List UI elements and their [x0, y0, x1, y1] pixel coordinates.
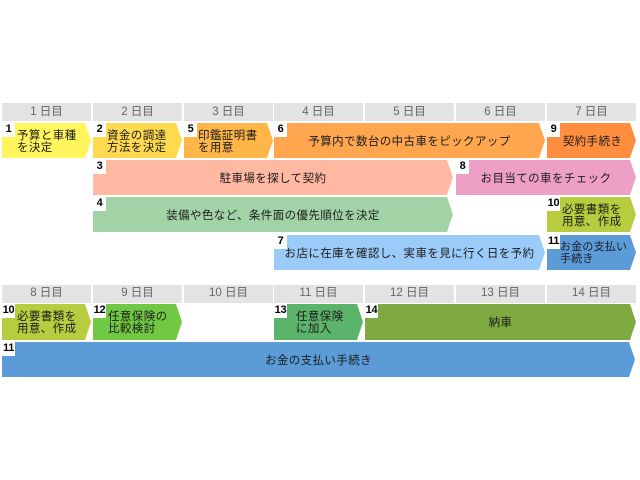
arrow 4: set priorities — [93, 197, 453, 232]
arrow 12: compare insurance: 任意保険の — [108, 311, 168, 323]
header: day 4 — [274, 103, 363, 121]
header: day 12 — [365, 285, 454, 303]
week 2 day headers — [2, 285, 636, 303]
arrow 8: check target car — [456, 160, 636, 195]
arrow 3: parking contract — [93, 160, 453, 195]
arrow 1: budget and car type: 予算と車種 — [17, 130, 76, 142]
arrow 1: budget and car type: を決定 — [17, 142, 53, 154]
header: day 7 — [547, 103, 636, 121]
arrow 2: funding method: 資金の調達 — [107, 130, 166, 142]
arrow 4: set priorities: 装備や色など、条件面の優先順位を決定 — [166, 209, 380, 221]
arrow 10: prepare documents: 10 — [548, 197, 559, 209]
arrow 11: payment procedure, full width: お金の支払い手続き — [265, 354, 372, 366]
header: day 6: 6 日目 — [484, 106, 517, 118]
arrow 2: funding method: 2 — [97, 123, 102, 135]
header: day 1 — [2, 103, 91, 121]
header: day 14 — [547, 285, 636, 303]
arrow 11: payment procedure: お金の支払い — [560, 241, 627, 253]
arrow 10: prepare documents: 用意、作成 — [562, 216, 622, 228]
arrow 10: prepare documents, week 2 — [2, 304, 91, 340]
header: day 8 — [2, 285, 91, 303]
arrow 11: payment procedure: 11 — [548, 235, 559, 247]
arrow 13: join insurance: 13 — [275, 304, 286, 316]
arrow 3: parking contract: 駐車場を探して契約 — [220, 172, 326, 184]
arrow 12: compare insurance: 12 — [94, 304, 105, 316]
arrow 11: payment procedure, full width: 11 — [3, 342, 14, 354]
header: day 14: 14 日目 — [572, 287, 611, 299]
header: day 9 — [93, 285, 182, 303]
header: day 2 — [93, 103, 182, 121]
header: day 3: 3 日目 — [212, 106, 245, 118]
header: day 5: 5 日目 — [393, 106, 426, 118]
header: day 10: 10 日目 — [209, 287, 248, 299]
arrow 12: compare insurance: 比較検討 — [108, 323, 156, 335]
header: day 5 — [365, 103, 454, 121]
arrow 14: delivery: 14 — [366, 304, 377, 316]
arrow 13: join insurance — [274, 304, 363, 340]
arrow 2: funding method: 方法を決定 — [107, 142, 166, 154]
arrow 13: join insurance: に加入 — [296, 323, 332, 335]
arrow 6: pick up used cars: 6 — [278, 123, 283, 135]
arrow 1: budget and car type: 1 — [6, 123, 11, 135]
arrow 14: delivery — [365, 304, 636, 340]
arrow 13: join insurance: 任意保険 — [296, 311, 344, 323]
header: day 10 — [184, 285, 273, 303]
arrow 4: set priorities: 4 — [97, 197, 102, 209]
arrow 6: pick up used cars: 予算内で数台の中古車をピックアップ — [308, 135, 511, 147]
header: day 9: 9 日目 — [121, 287, 154, 299]
header: day 7: 7 日目 — [575, 106, 608, 118]
arrow 5: seal certificate: を用意 — [198, 142, 234, 154]
arrow 10: prepare documents, week 2: 必要書類を — [17, 311, 76, 323]
arrow 2: funding method — [93, 123, 182, 158]
header: day 13 — [456, 285, 545, 303]
arrow 8: check target car: お目当ての車をチェック — [481, 172, 611, 184]
header: day 2: 2 日目 — [121, 106, 154, 118]
arrow 9: contract procedure: 9 — [551, 123, 556, 135]
header: day 6 — [456, 103, 545, 121]
header: day 4: 4 日目 — [302, 106, 335, 118]
arrow 5: seal certificate — [184, 123, 273, 158]
arrow 9: contract procedure: 契約手続き — [563, 135, 622, 147]
header: day 11 — [274, 285, 363, 303]
arrow 7: confirm stock and reserve viewing: お店に在庫を確認し、実車を見に行く日を予約 — [285, 247, 534, 259]
arrow 10: prepare documents: 必要書類を — [562, 204, 622, 216]
arrow 5: seal certificate: 5 — [188, 123, 193, 135]
header: day 12: 12 日目 — [390, 287, 429, 299]
arrow 14: delivery: 納車 — [489, 317, 512, 329]
header: day 8: 8 日目 — [30, 287, 63, 299]
arrow 7: confirm stock and reserve viewing — [274, 235, 545, 270]
header: day 3 — [184, 103, 273, 121]
arrow 7: confirm stock and reserve viewing: 7 — [278, 235, 283, 247]
arrow 11: payment procedure — [547, 235, 636, 270]
arrow 11: payment procedure, full width — [2, 342, 635, 377]
arrow 8: check target car: 8 — [460, 160, 465, 172]
arrow 11: payment procedure: 手続き — [560, 253, 594, 265]
arrow 10: prepare documents, week 2: 用意、作成 — [17, 323, 76, 335]
arrow 9: contract procedure — [547, 123, 636, 158]
week 1 day headers — [2, 103, 636, 121]
arrow 12: compare insurance — [93, 304, 182, 340]
header: day 11: 11 日目 — [299, 287, 338, 299]
arrow 10: prepare documents — [547, 197, 636, 232]
arrow 1: budget and car type — [2, 123, 91, 158]
arrow 10: prepare documents, week 2: 10 — [3, 304, 14, 316]
arrow 6: pick up used cars — [274, 123, 545, 158]
arrow 3: parking contract: 3 — [97, 160, 102, 172]
arrow 5: seal certificate: 印鑑証明書 — [198, 130, 258, 142]
header: day 1: 1 日目 — [30, 106, 63, 118]
header: day 13: 13 日目 — [481, 287, 520, 299]
